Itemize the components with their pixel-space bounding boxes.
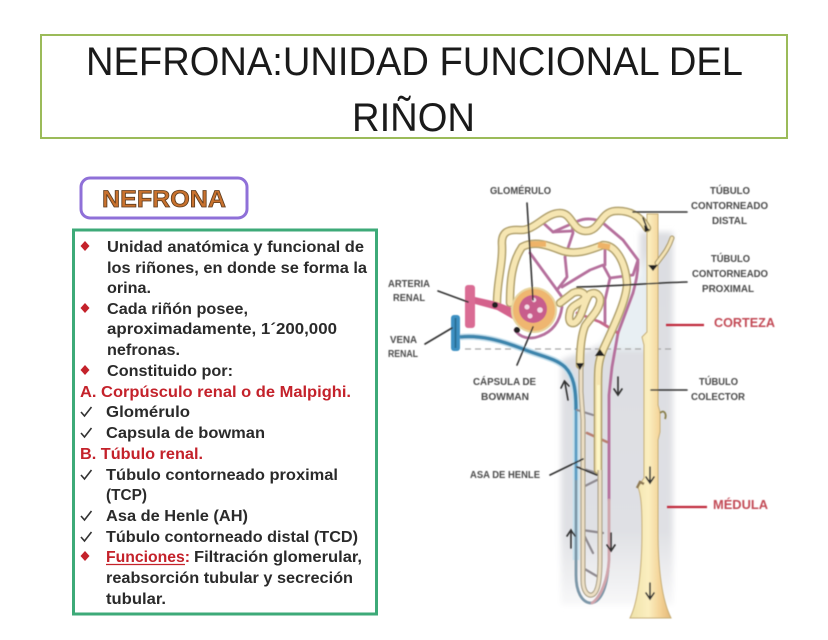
- diagram labels: BOWMAN: [481, 392, 529, 403]
- bullet: functions: Funciones:: [106, 549, 190, 566]
- diagram labels: VENA: [390, 335, 417, 346]
- section B: B. Túbulo renal.: [80, 446, 203, 463]
- dashed cortex boundary: [465, 348, 672, 350]
- heading: NEFRONA badge: [81, 178, 247, 218]
- red cortex and medulla rules: [666, 325, 707, 507]
- diagram labels: GLOMÉRULO: [490, 184, 551, 197]
- title: RIÑON: [352, 95, 475, 140]
- diagram labels: CONTORNEADO: [692, 269, 768, 280]
- check: TCP: (TCP): [106, 487, 147, 504]
- diagram labels: COLECTOR: [691, 392, 746, 403]
- heading: NEFRONA badge: NEFRONA: [102, 186, 226, 213]
- bullet: functions: Filtración glomerular,: [194, 549, 362, 566]
- bullet: constituted by: Constituido por:: [107, 363, 233, 380]
- proximal tubule and ascending limb: [510, 244, 627, 470]
- diagram labels: [388, 184, 775, 512]
- diagram: nephron illustration: [388, 184, 775, 618]
- bullet: number of nephrons: nefronas.: [107, 342, 180, 359]
- diagram labels: TÚBULO: [711, 252, 750, 265]
- diagram labels: ASA DE HENLE: [470, 470, 540, 481]
- bullet: definition: orina.: [107, 280, 151, 297]
- tissue background: [561, 232, 673, 605]
- check: TCP: Túbulo contorneado proximal: [106, 467, 338, 484]
- diagram labels: CORTEZA: [714, 316, 775, 330]
- bullet: definition: Unidad anatómica y funcional de: [107, 239, 364, 256]
- diagram labels: MÉDULA: [713, 497, 768, 512]
- distal convoluted tubule: [497, 211, 647, 303]
- diagram labels: RENAL: [388, 349, 418, 360]
- check: capsula: Capsula de bowman: [106, 425, 265, 442]
- collecting tubule: [630, 214, 672, 618]
- pink capillaries: [515, 219, 638, 603]
- diagram labels: TÚBULO: [699, 375, 738, 388]
- leader lines and flow arrows: [425, 203, 687, 599]
- title: [41, 35, 787, 140]
- diagram labels: CÁPSULA DE: [473, 375, 536, 388]
- title: NEFRONA:UNIDAD FUNCIONAL DEL: [86, 40, 743, 84]
- bullet: definition: [80, 239, 367, 297]
- diagram labels: TÚBULO: [710, 184, 750, 197]
- glomerulus and Bowman capsule: [512, 288, 556, 332]
- bullet: functions: tubular.: [106, 591, 166, 608]
- check: TCP: [81, 467, 338, 504]
- bullet: number of nephrons: aproximadamente, 1´200,000: [107, 321, 337, 338]
- bullet: number of nephrons: [80, 301, 337, 359]
- check: AH: Asa de Henle (AH): [106, 508, 248, 525]
- section A: A. Corpúsculo renal o de Malpighi.: [80, 384, 351, 401]
- diagram labels: CONTORNEADO: [691, 201, 768, 212]
- check: TCD: Túbulo contorneado distal (TCD): [106, 529, 358, 546]
- bullet: definition: los riñones, en donde se forma la: [107, 260, 367, 277]
- renal artery: [465, 285, 525, 328]
- bullet: number of nephrons: Cada riñón posee,: [107, 301, 248, 318]
- diagram labels: ARTERIA: [388, 279, 430, 290]
- diagram labels: RENAL: [393, 293, 425, 304]
- descending limb coil and loop of Henle: [560, 292, 600, 595]
- bullet: functions: [80, 549, 362, 608]
- blue vein: [451, 315, 608, 603]
- diagram labels: PROXIMAL: [702, 284, 754, 295]
- panel: text list: [74, 230, 376, 614]
- check: glomerulo: Glomérulo: [106, 404, 190, 421]
- diagram labels: DISTAL: [712, 216, 747, 227]
- bullet: functions: reabsorción tubular y secreción: [106, 570, 353, 587]
